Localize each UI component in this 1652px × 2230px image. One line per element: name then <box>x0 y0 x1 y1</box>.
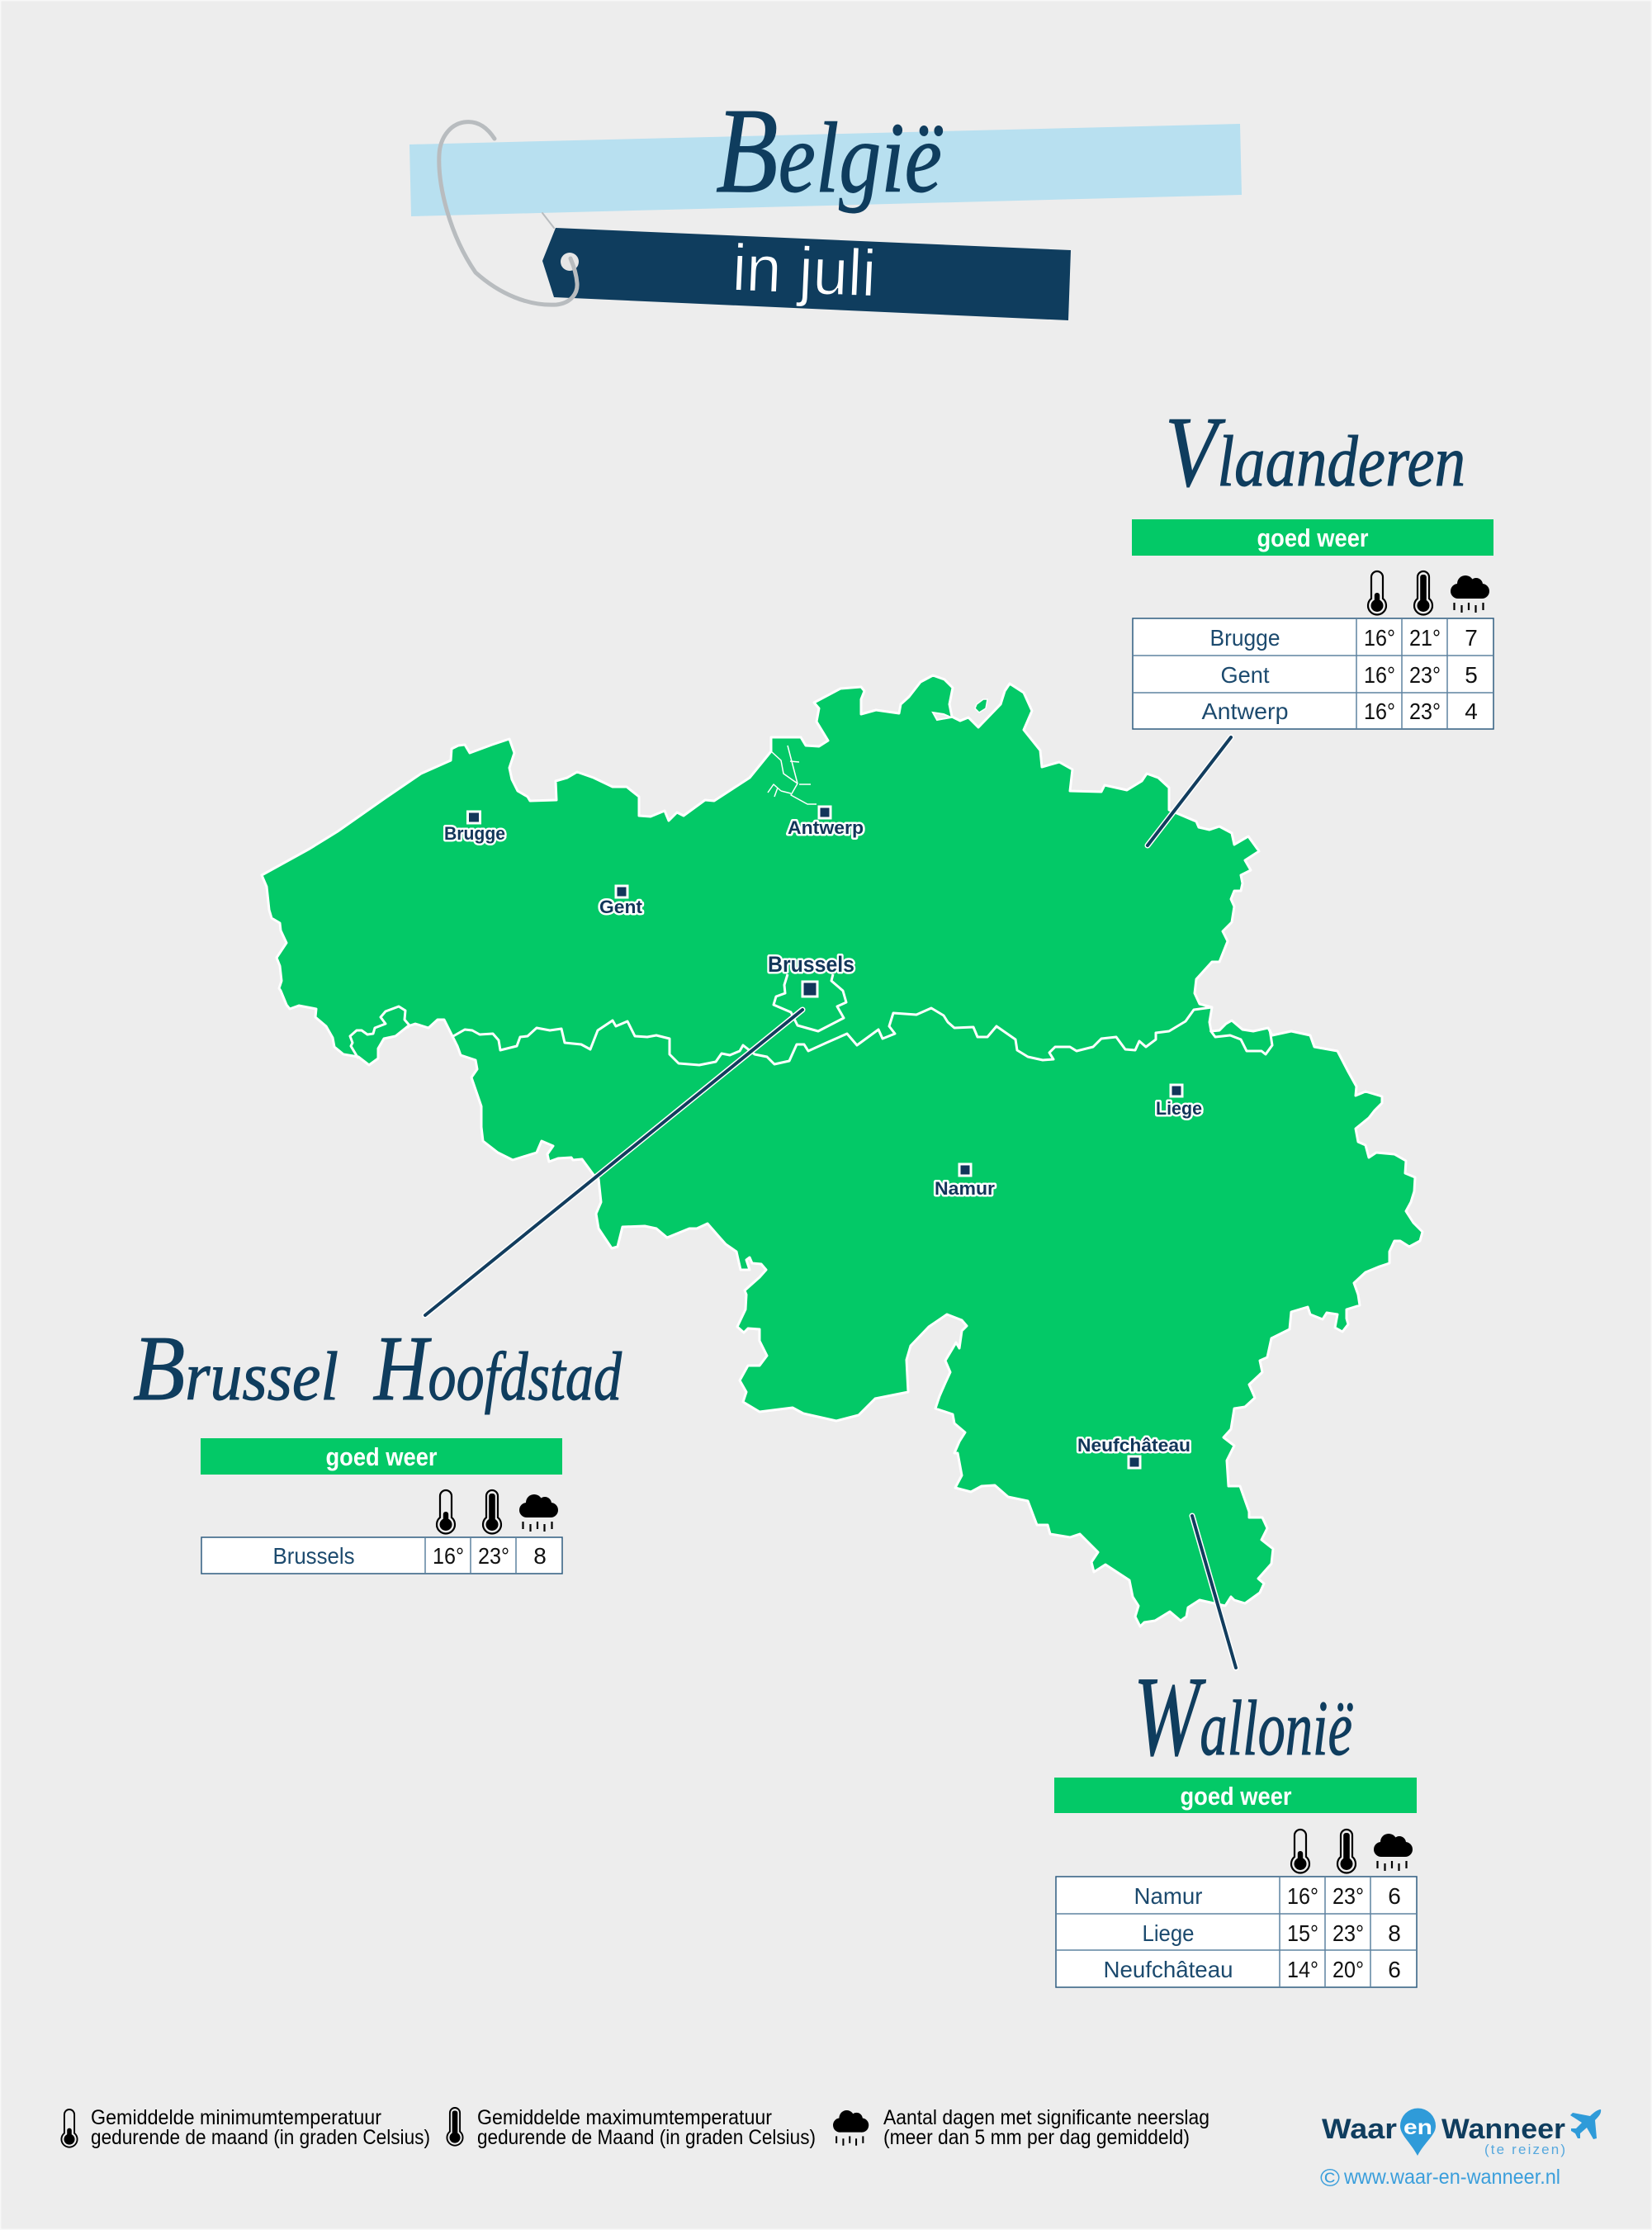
weather table: 23° <box>1332 1883 1364 1909</box>
weather rating bar <box>1132 519 1493 556</box>
weather rating bar: goed weer <box>1257 523 1369 552</box>
Flanders-Wallonia border <box>453 1007 1212 1065</box>
weather table: 23° <box>1332 1920 1364 1946</box>
logo pin <box>1400 2109 1436 2156</box>
logo wordmark right: Wanneer <box>1441 2114 1565 2145</box>
marker: Antwerp <box>788 807 864 838</box>
marker: Namur <box>935 1164 995 1199</box>
leader line: Brussel <box>425 1010 802 1315</box>
legend <box>61 2106 1209 2149</box>
marker: Brugge: Brugge <box>444 823 505 844</box>
legend: minimum temperature: Gemiddelde minimumtemperatuur <box>91 2106 381 2129</box>
marker: Namur: Namur <box>935 1178 995 1199</box>
weather table: 6 <box>1388 1957 1401 1982</box>
weather table: 16° <box>433 1543 464 1569</box>
weather table: 16° <box>1287 1883 1318 1909</box>
country shape <box>262 675 1422 1626</box>
small Belgian enclave <box>975 699 987 713</box>
weather table: Namur <box>1134 1883 1202 1909</box>
icon: airplane <box>1570 2109 1601 2139</box>
panel: Vlaanderen <box>1132 396 1493 729</box>
legend: rain days <box>833 2106 1209 2149</box>
heading: Vlaanderen <box>1165 396 1465 508</box>
weather table: Brugge <box>1210 625 1280 651</box>
heading <box>133 1318 622 1420</box>
weather table: 5 <box>1465 662 1478 688</box>
weather table: 23° <box>478 1543 509 1569</box>
title banner <box>409 83 1242 320</box>
legend: rain days: (meer dan 5 mm per dag gemiddeld) <box>883 2126 1190 2149</box>
column icons <box>1368 571 1489 614</box>
marker: Brugge <box>444 812 505 844</box>
leader line: Wallonië <box>1192 1516 1236 1668</box>
marker: Gent <box>599 886 643 917</box>
weather table: 15° <box>1287 1920 1318 1946</box>
light blue band <box>409 124 1242 216</box>
Scheldt river <box>768 746 817 804</box>
weather table: 16° <box>1364 662 1395 688</box>
legend: maximum temperature: gedurende de Maand (in graden Celsius) <box>477 2126 816 2149</box>
Brussels region border <box>774 974 846 1031</box>
Voeren border <box>1210 1030 1272 1054</box>
weather table: Neufchâteau <box>1103 1957 1233 1982</box>
heading: Hoofdstad <box>372 1318 622 1420</box>
weather table <box>201 1537 562 1574</box>
legend: minimum temperature <box>61 2106 430 2149</box>
copyright and url: www.waar-en-wanneer.nl <box>1343 2166 1560 2189</box>
marker: Liege <box>1156 1085 1202 1119</box>
weather table: 6 <box>1388 1883 1401 1909</box>
weather table: 16° <box>1364 625 1395 651</box>
weather table: 4 <box>1465 698 1478 724</box>
weather table: Brussels <box>272 1543 355 1569</box>
Baarle enclave <box>933 713 951 720</box>
weather table: 16° <box>1364 698 1395 724</box>
month subtitle: in juli <box>731 230 878 310</box>
weather table: 8 <box>533 1543 547 1569</box>
panel: Brussel Hoofdstad <box>133 1318 622 1574</box>
weather table: 21° <box>1409 625 1441 651</box>
column icons <box>437 1490 558 1533</box>
marker: Liege: Liege <box>1156 1098 1202 1119</box>
marker: Gent: Gent <box>599 897 643 917</box>
marker: Brussels <box>768 952 854 997</box>
tag hole <box>561 253 579 271</box>
weather rating bar <box>201 1438 562 1475</box>
logo <box>1320 2109 1601 2192</box>
weather table: 7 <box>1465 625 1478 651</box>
weather table: 23° <box>1409 662 1441 688</box>
marker: Antwerp: Antwerp <box>788 817 864 838</box>
marker: Neufchâteau: Neufchâteau <box>1077 1435 1190 1456</box>
legend: maximum temperature <box>447 2106 816 2149</box>
logo wordmark left: Waar <box>1322 2114 1397 2145</box>
weather table: Antwerp <box>1202 698 1288 724</box>
weather table: 20° <box>1332 1957 1364 1982</box>
weather table: 14° <box>1287 1957 1318 1982</box>
logo pin: en <box>1403 2116 1432 2139</box>
heading: Brussel <box>133 1318 338 1420</box>
panel: Wallonië <box>1054 1653 1417 1987</box>
weather table: Gent <box>1220 662 1270 688</box>
leader line: Vlaanderen <box>1148 737 1231 845</box>
tag string <box>438 122 577 318</box>
Mouscron border <box>350 1006 409 1058</box>
legend: maximum temperature: Gemiddelde maximumtemperatuur <box>477 2106 772 2129</box>
column icons <box>1291 1830 1413 1873</box>
weather table <box>1056 1877 1417 1987</box>
marker: Brussels: Brussels <box>768 952 854 977</box>
logo tagline: (te reizen) <box>1484 2142 1565 2157</box>
heading: Wallonië <box>1134 1653 1353 1779</box>
legend: rain days: Aantal dagen met significante neerslag <box>883 2106 1209 2129</box>
dark tag <box>542 228 1071 320</box>
marker: Neufchâteau <box>1077 1435 1190 1468</box>
weather table: 8 <box>1388 1920 1401 1946</box>
weather rating bar: goed weer <box>325 1442 438 1471</box>
weather table: 23° <box>1409 698 1441 724</box>
weather rating bar: goed weer <box>1181 1782 1291 1811</box>
weather rating bar <box>1054 1778 1417 1813</box>
map of Belgium <box>262 675 1422 1626</box>
country title: België <box>716 83 944 219</box>
copyright and url: © <box>1320 2165 1340 2192</box>
weather table <box>1133 618 1493 729</box>
weather table: Liege <box>1143 1920 1194 1946</box>
legend: minimum temperature: gedurende de maand (in graden Celsius) <box>91 2126 430 2149</box>
